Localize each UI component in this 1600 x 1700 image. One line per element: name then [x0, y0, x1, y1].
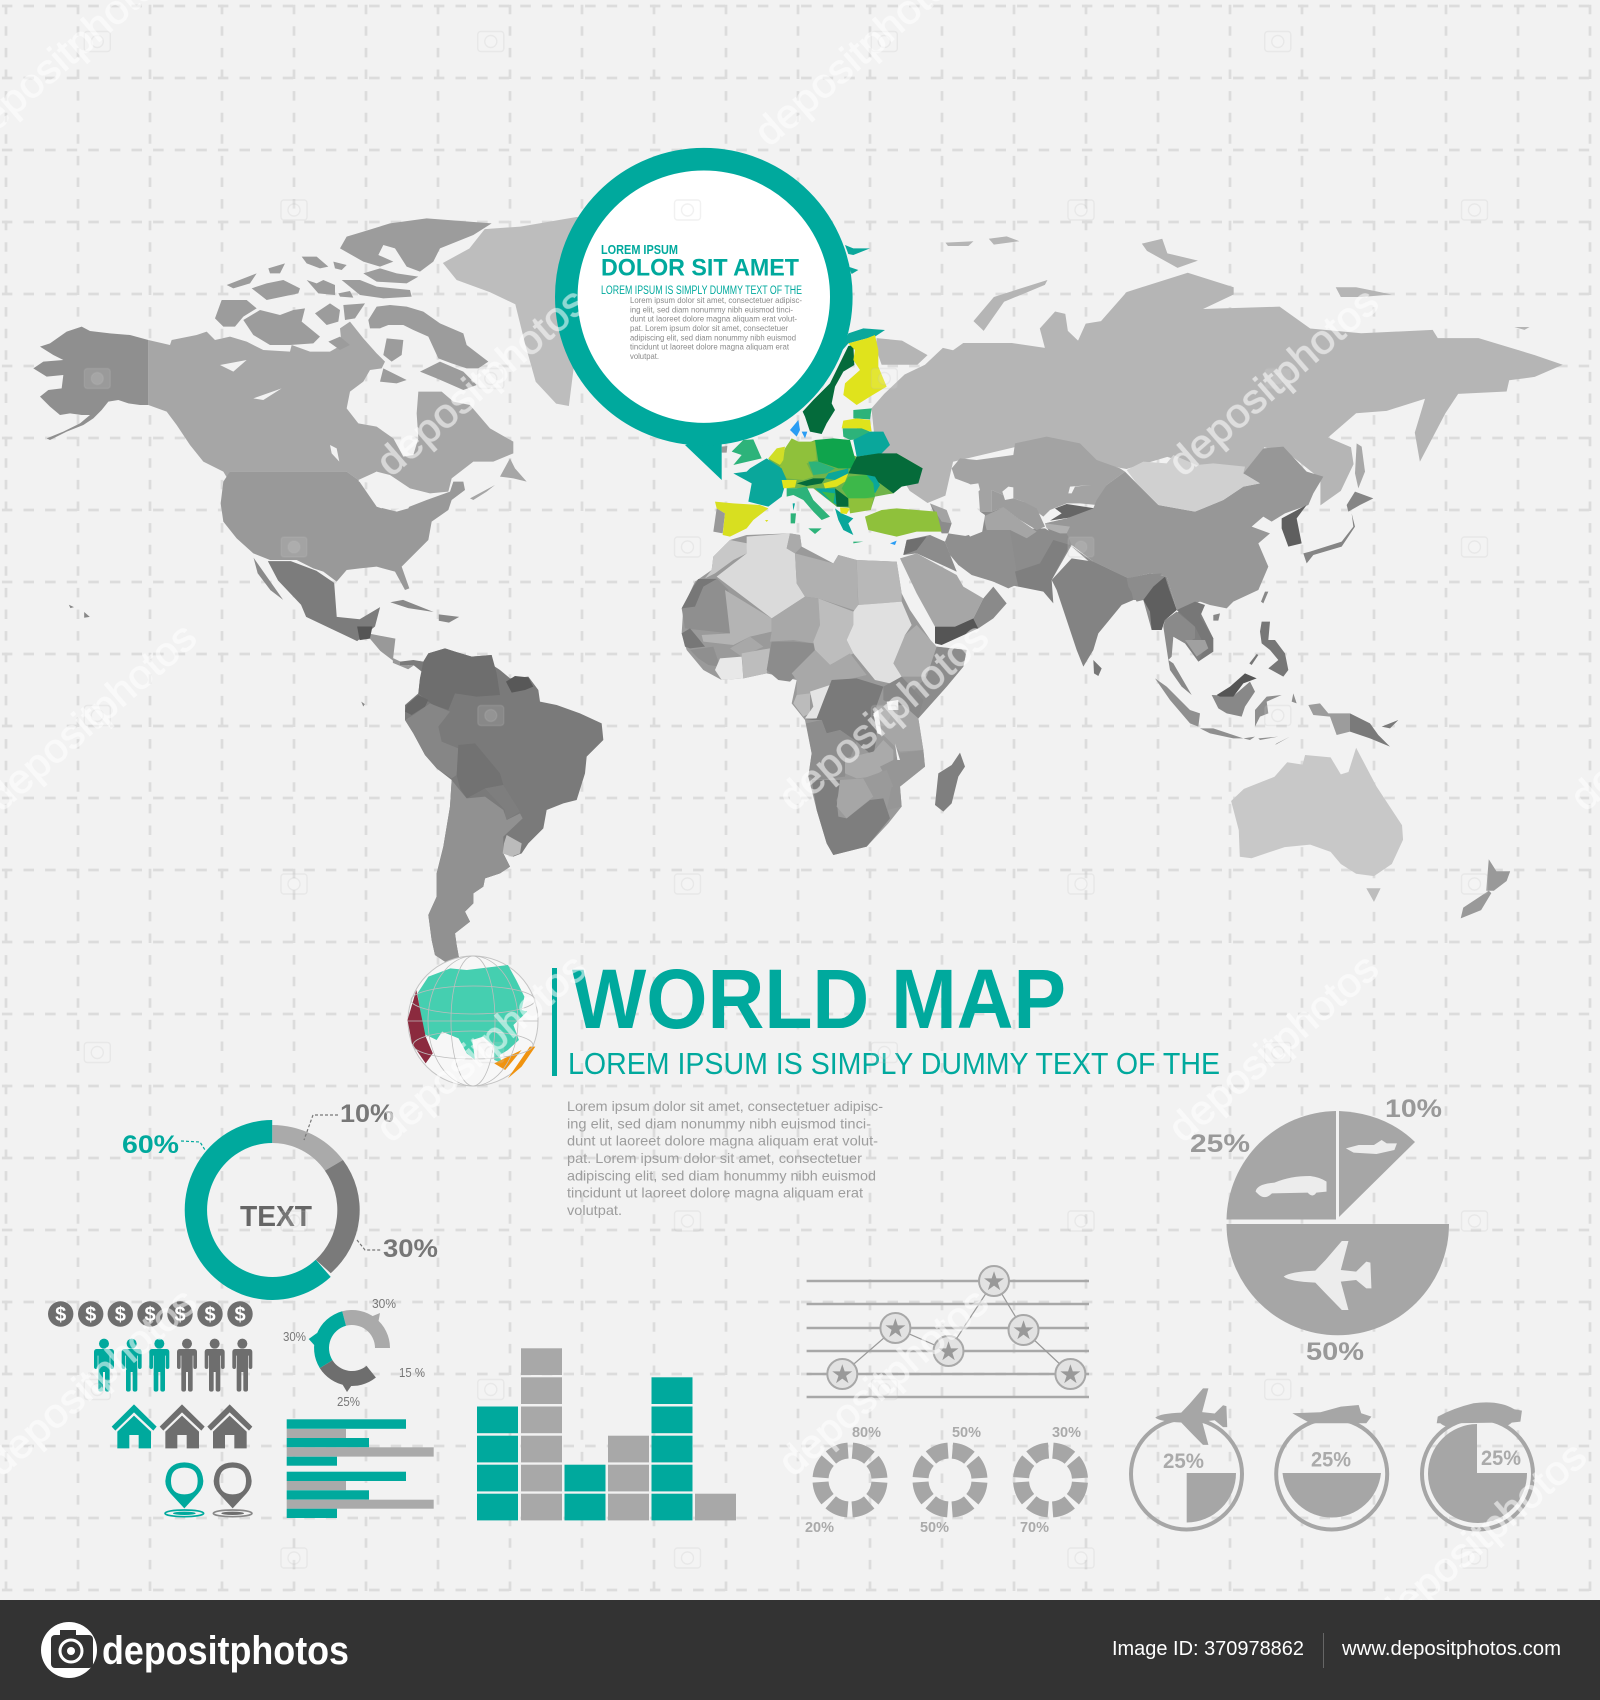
text watermarks: depositphotos: [1160, 280, 1387, 485]
subtitle: LOREM IPSUM IS SIMPLY DUMMY TEXT OF THE: [568, 1046, 1220, 1081]
body paragraph: [567, 1098, 883, 1218]
title: WORLD MAP: [572, 952, 1066, 1046]
dollar coin row: $: [115, 1304, 126, 1326]
text watermarks: depositphotos: [1160, 946, 1387, 1151]
horizontal bar chart: [287, 1419, 434, 1518]
bubble tail: [685, 435, 722, 480]
body paragraph: dunt ut laoreet dolore magna aliquam erat volut-: [567, 1133, 878, 1149]
small donut chart: 30%: [283, 1329, 306, 1344]
segmented ring charts: 70%: [1020, 1519, 1049, 1536]
bubble subheading: LOREM IPSUM IS SIMPLY DUMMY TEXT OF THE: [601, 285, 802, 297]
bubble paragraph: adipiscing elit, sed diam nonummy nibh euismod: [630, 332, 796, 342]
star line chart: ★: [982, 1266, 1006, 1296]
bubble paragraph: [630, 295, 802, 361]
callout bubble: [566, 159, 841, 480]
dollar coin row: $: [234, 1304, 246, 1326]
body paragraph: ing elit, sed diam nonummy nibh euismod tinci-: [567, 1115, 871, 1131]
star line chart: ★: [1059, 1359, 1082, 1389]
gauge: car 25%: 25%: [1481, 1447, 1521, 1470]
bubble paragraph: dunt ut laoreet dolore magna aliquam erat volut-: [630, 314, 797, 324]
footer logo text: depositphotos: [102, 1629, 349, 1673]
image id: Image ID: 370978862: [1112, 1638, 1304, 1660]
star line chart: ★: [831, 1359, 854, 1389]
bubble paragraph: ing elit, sed diam nonummy nibh euismod tinci-: [630, 304, 793, 314]
text watermarks: depositphotos: [1368, 1434, 1595, 1639]
map: Russia, northern islands, Australia and New Zealand: [866, 236, 1563, 918]
segmented ring charts: 30%: [1052, 1424, 1081, 1441]
text watermarks: depositphotos: [368, 280, 595, 485]
map: Middle East and Asia: [900, 437, 1398, 747]
donut chart: 60 10 30: TEXT: [240, 1201, 312, 1233]
bubble eyebrow: LOREM IPSUM: [601, 243, 678, 257]
gauge: ship 25%: 25%: [1311, 1449, 1351, 1472]
footer logo mark: [41, 1622, 97, 1678]
small donut chart: [283, 1296, 425, 1409]
text watermarks: depositphotos: [368, 946, 595, 1151]
stacked block column chart: [477, 1348, 736, 1520]
segmented ring charts: 20%: [805, 1519, 834, 1536]
bubble paragraph: tincidunt ut laoreet dolore magna aliquam erat: [630, 342, 790, 352]
star line chart: ★: [1012, 1315, 1035, 1345]
pie chart with transport icons: 10%: [1385, 1095, 1442, 1123]
map: Greenland, Mexico and Caribbean: [69, 217, 633, 707]
gauge: plane 25%: [1131, 1388, 1242, 1530]
dollar coin row: [48, 1301, 253, 1327]
pie chart with transport icons: 50%: [1306, 1338, 1364, 1366]
gauge: car 25%: [1422, 1402, 1533, 1530]
body paragraph: adipiscing elit, sed diam honummy nibh euismod: [567, 1167, 876, 1183]
bubble paragraph: Lorem ipsum dolor sit amet, consectetuer adipisc-: [630, 295, 802, 305]
body paragraph: pat. Lorem ipsum dolor sit amet, consectetuer: [567, 1150, 862, 1166]
small donut chart: 25%: [337, 1394, 360, 1409]
text watermarks: depositphotos: [770, 1280, 997, 1485]
donut chart: 60 10 30: 30%: [383, 1235, 438, 1263]
donut chart: 60 10 30: 10%: [340, 1100, 394, 1128]
website: www.depositphotos.com: [1341, 1638, 1561, 1660]
pie chart with transport icons: 25%: [1190, 1130, 1250, 1158]
star line chart: ★: [937, 1336, 960, 1366]
small donut chart: 15 %: [399, 1365, 425, 1380]
map: North America: [33, 218, 527, 590]
gauge: plane 25%: 25%: [1163, 1450, 1204, 1473]
bubble paragraph: volutpat.: [630, 351, 659, 361]
body paragraph: tincidunt ut laoreet dolore magna aliquam erat: [567, 1185, 863, 1201]
bubble ring: [566, 159, 841, 434]
globe icon: [408, 956, 538, 1086]
donut chart: 60 10 30: [122, 1100, 438, 1300]
star line chart: [807, 1266, 1089, 1397]
segmented ring charts: 80%: [852, 1424, 881, 1441]
footer bar: [0, 1600, 1600, 1700]
pie chart with transport icons: [1190, 1095, 1449, 1366]
bubble heading: DOLOR SIT AMET: [601, 255, 799, 282]
dollar coin row: $: [174, 1304, 186, 1326]
bubble paragraph: pat. Lorem ipsum dolor sit amet, consectetuer: [630, 323, 788, 333]
people pictogram row: [94, 1339, 252, 1392]
dollar coin row: $: [144, 1304, 156, 1326]
body paragraph: Lorem ipsum dolor sit amet, consectetuer adipisc-: [567, 1098, 883, 1114]
star line chart: ★: [884, 1313, 907, 1343]
donut chart: 60 10 30: 60%: [122, 1131, 179, 1159]
map: Africa: [682, 533, 967, 855]
map: Europe highlighted in colour: [713, 245, 942, 545]
small donut chart: 30%: [372, 1296, 396, 1311]
world map: [33, 217, 1563, 965]
gauge: ship 25%: [1276, 1405, 1387, 1530]
text watermarks: depositphotos: [770, 615, 997, 820]
dollar coin row: $: [55, 1304, 66, 1326]
segmented ring charts: 50%: [920, 1519, 949, 1536]
map pins: [165, 1462, 252, 1517]
segmented ring charts: 50%: [952, 1424, 981, 1441]
house pictogram row: [112, 1404, 252, 1448]
title rule: [552, 968, 557, 1076]
body paragraph: volutpat.: [567, 1202, 622, 1218]
dollar coin row: $: [204, 1304, 216, 1326]
map: South America: [400, 648, 603, 965]
dollar coin row: $: [85, 1304, 96, 1326]
segmented ring charts: [805, 1424, 1081, 1536]
